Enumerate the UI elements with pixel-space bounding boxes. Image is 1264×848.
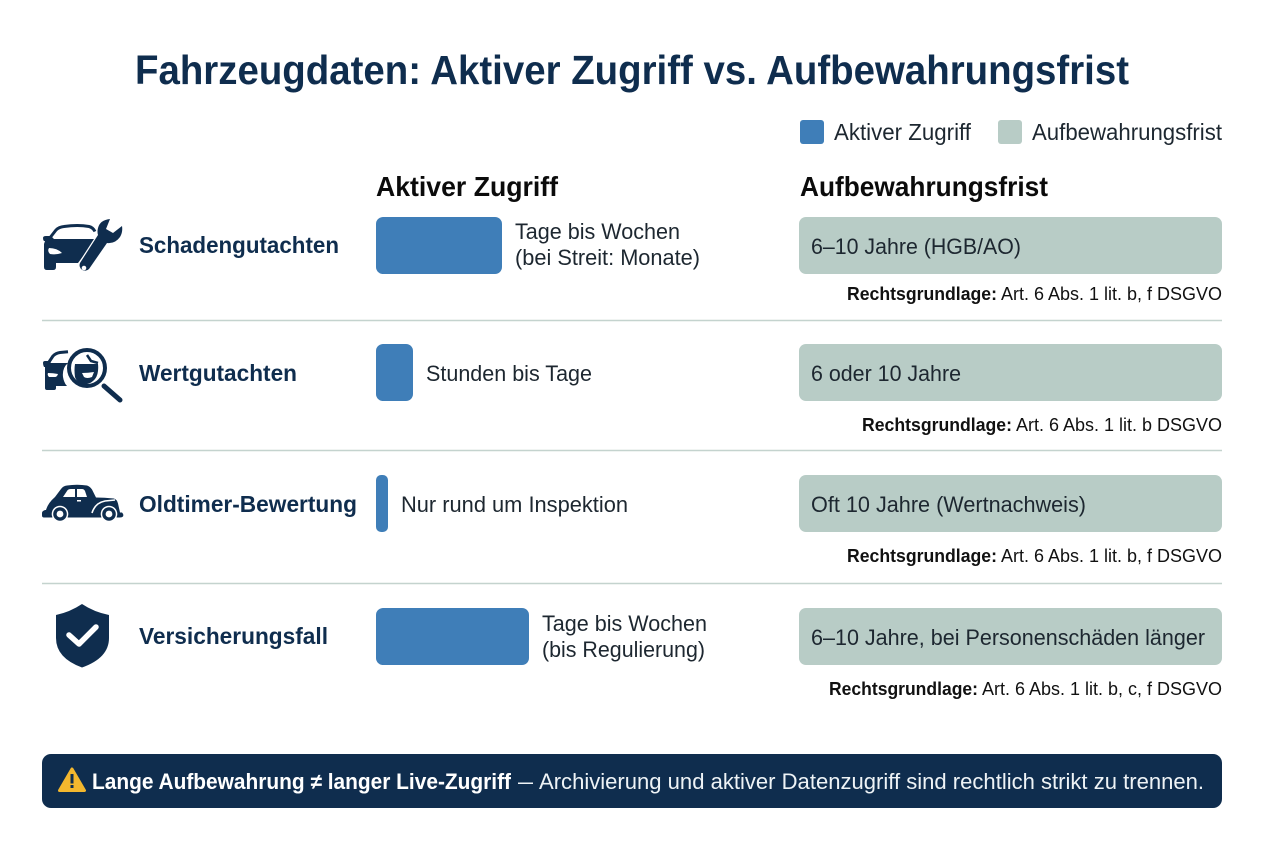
- legal basis: [862, 415, 1222, 435]
- callout banner: [42, 754, 1222, 808]
- active access bar: [376, 475, 388, 532]
- active access text: (bis Regulierung): [542, 637, 705, 662]
- active access text: [515, 219, 700, 270]
- label: Versicherungsfall: [139, 623, 328, 649]
- legal basis: Rechtsgrundlage:: [847, 284, 997, 304]
- callout text: [92, 769, 1204, 794]
- active access text: [542, 611, 707, 662]
- active access text: Stunden bis Tage: [426, 361, 592, 386]
- icon: vintage car: [42, 485, 123, 522]
- retention bar: [799, 475, 1222, 532]
- legend: Aktiver Zugriff: [834, 119, 972, 145]
- retention text: 6–10 Jahre (HGB/AO): [811, 234, 1021, 259]
- legend: Aufbewahrungsfrist: [1032, 119, 1223, 145]
- active access bar: [376, 344, 413, 401]
- callout text: Archivierung und aktiver Datenzugriff sind rechtlich strikt zu trennen.: [539, 769, 1204, 794]
- active access text: (bei Streit: Monate): [515, 245, 700, 270]
- icon: warning triangle: [60, 769, 84, 790]
- legal basis: Art. 6 Abs. 1 lit. b, f DSGVO: [1001, 546, 1222, 566]
- legal basis: Art. 6 Abs. 1 lit. b DSGVO: [1016, 415, 1222, 435]
- legend: [800, 119, 1223, 145]
- legal basis: Rechtsgrundlage:: [847, 546, 997, 566]
- icon: shield with check: [56, 604, 109, 668]
- label: Wertgutachten: [139, 360, 297, 386]
- callout text: —: [518, 769, 533, 794]
- active access text: Tage bis Wochen: [542, 611, 707, 636]
- active access text: Tage bis Wochen: [515, 219, 680, 244]
- row: Wertgutachten: [43, 344, 1222, 435]
- legal basis: Rechtsgrundlage:: [862, 415, 1012, 435]
- label: Schadengutachten: [139, 232, 339, 258]
- icon: car with wrench: [43, 219, 122, 271]
- retention text: 6 oder 10 Jahre: [811, 361, 961, 386]
- icon: car under magnifier: [43, 350, 120, 400]
- column heading: Aktiver Zugriff: Aktiver Zugriff: [376, 171, 559, 202]
- column heading: Aufbewahrungsfrist: Aufbewahrungsfrist: [800, 171, 1048, 202]
- row: Versicherungsfall: [56, 604, 1222, 699]
- active access bar: [376, 608, 529, 665]
- title: Fahrzeugdaten: Aktiver Zugriff vs. Aufbewahrungsfrist: [135, 47, 1129, 93]
- retention text: 6–10 Jahre, bei Personenschäden länger: [811, 625, 1205, 650]
- legal basis: [847, 284, 1222, 304]
- active access bar: [376, 217, 502, 274]
- retention text: Oft 10 Jahre (Wertnachweis): [811, 492, 1086, 517]
- legal basis: [847, 546, 1222, 566]
- legal basis: Art. 6 Abs. 1 lit. b, f DSGVO: [1001, 284, 1222, 304]
- legal basis: Rechtsgrundlage:: [829, 679, 978, 699]
- row: Oldtimer-Bewertung: [42, 475, 1222, 566]
- legal basis: Art. 6 Abs. 1 lit. b, c, f DSGVO: [982, 679, 1222, 699]
- active access text: Nur rund um Inspektion: [401, 492, 628, 517]
- row: Schadengutachten: [43, 217, 1222, 304]
- retention bar: [799, 608, 1222, 665]
- legal basis: [829, 679, 1222, 699]
- label: Oldtimer-Bewertung: [139, 491, 357, 517]
- callout text: Lange Aufbewahrung ≠ langer Live-Zugriff: [92, 769, 512, 794]
- retention bar: [799, 344, 1222, 401]
- retention bar: [799, 217, 1222, 274]
